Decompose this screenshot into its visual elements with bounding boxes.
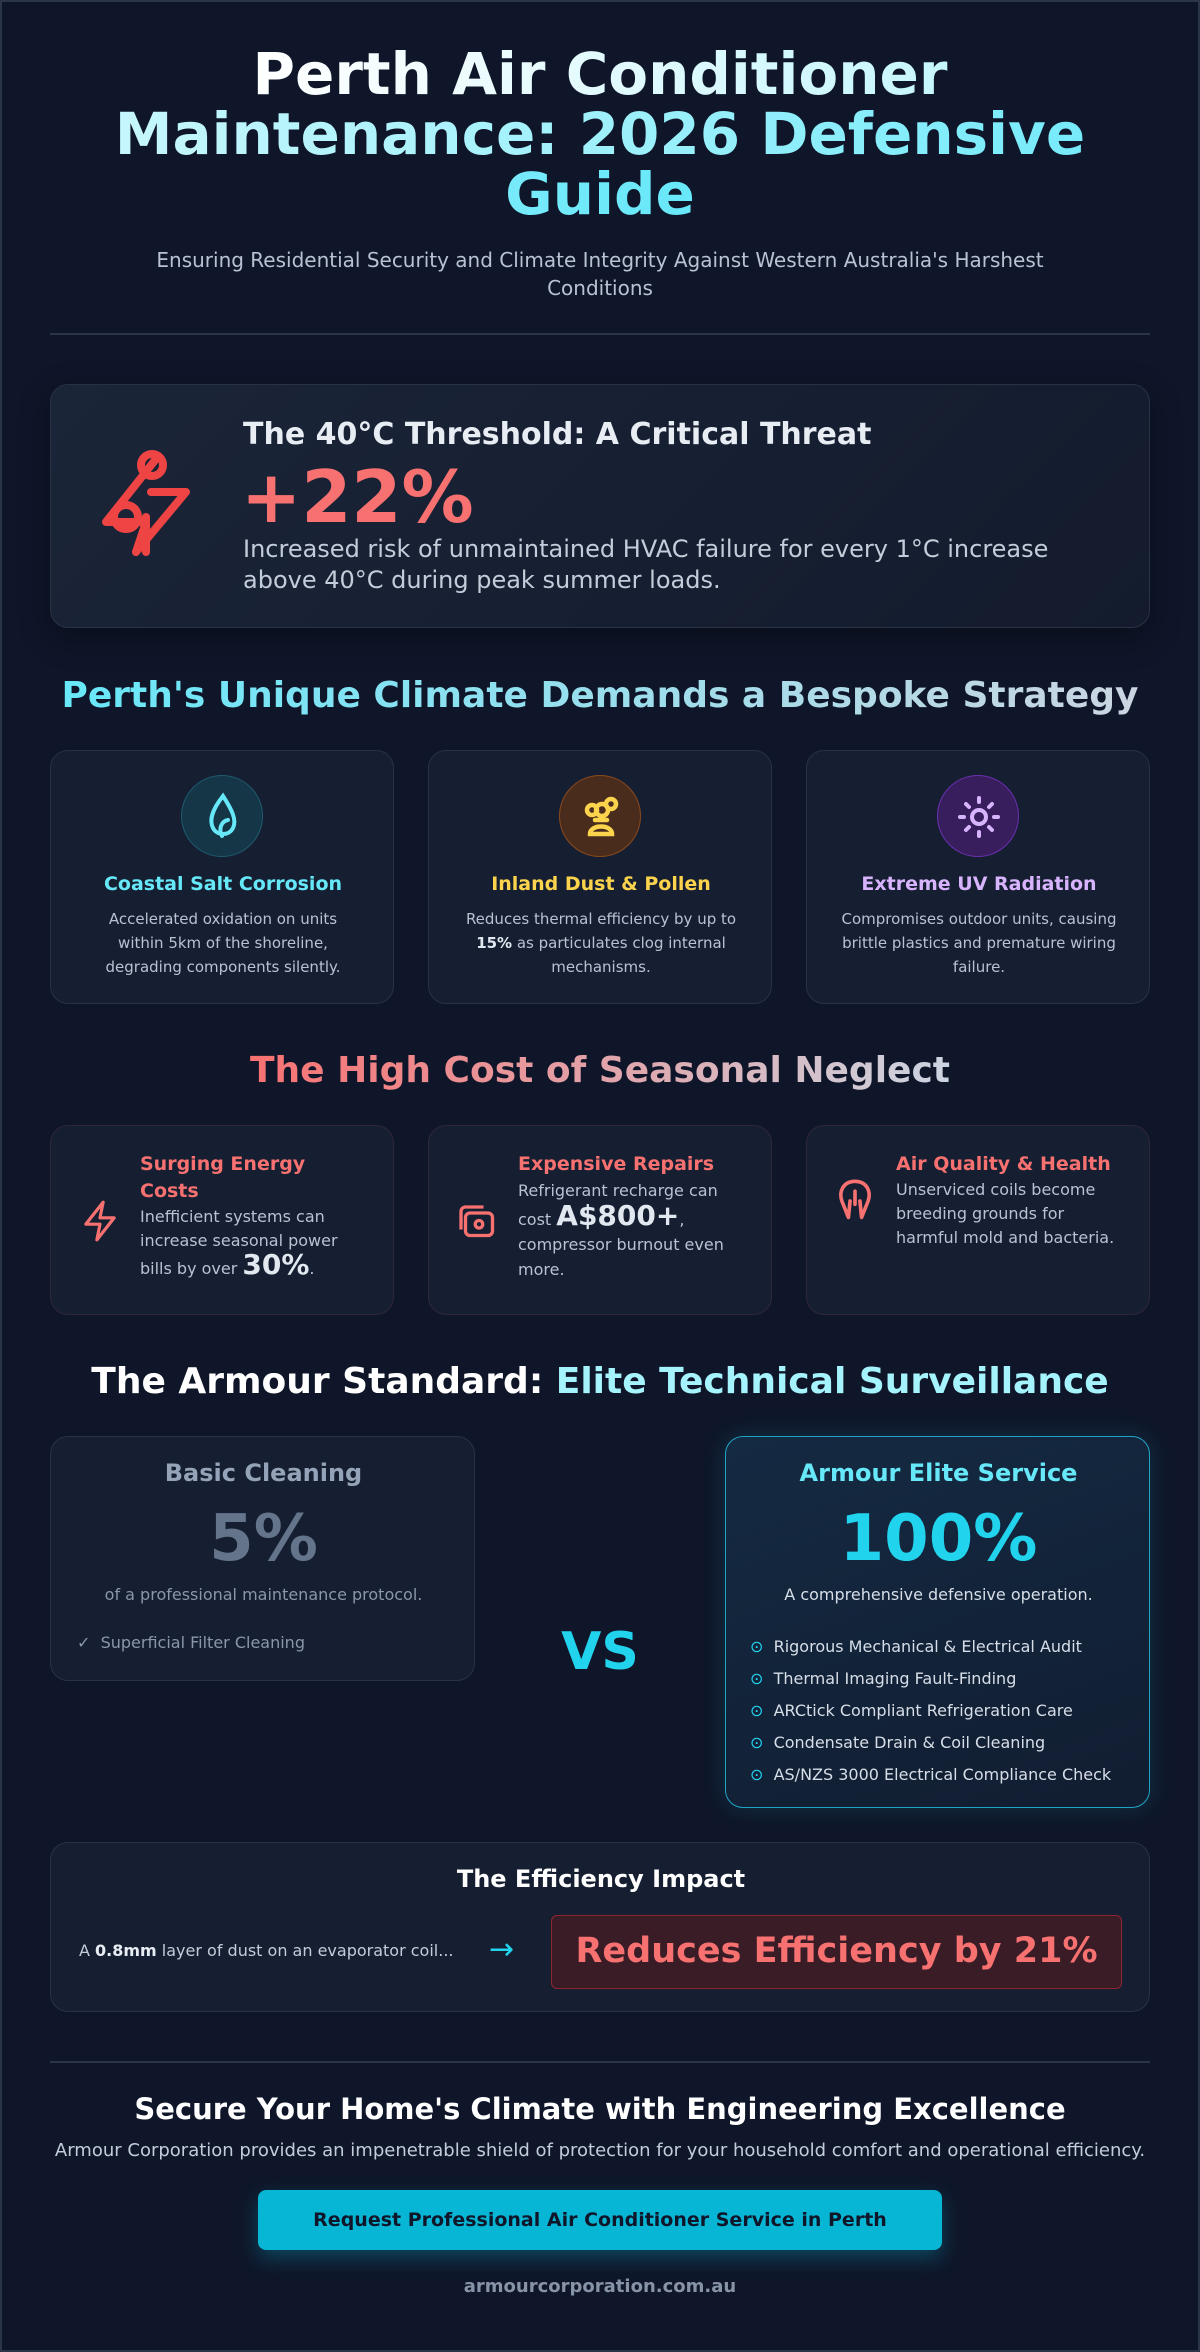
text: Accelerated oxidation on units within 5km of the shoreline, degrading components silently. (106, 910, 340, 976)
title: Basic Cleaning (165, 1459, 362, 1487)
footer: armourcorporation.com.au (464, 2276, 736, 2297)
stat: 100% (840, 1502, 1037, 1576)
title: Extreme UV Radiation (861, 873, 1097, 895)
icon: money (459, 1205, 494, 1238)
item: ✓ Superficial Filter Cleaning (77, 1633, 305, 1652)
title: The Efficiency Impact (457, 1865, 745, 1893)
panel: elite service (725, 1436, 1150, 1808)
left text: A 0.8mm layer of dust on an evaporator coil... (79, 1941, 453, 1960)
desc: A comprehensive defensive operation. (784, 1585, 1093, 1604)
icon: bolt (84, 1200, 116, 1242)
heading: armour standard: The Armour Standard: Elite Technical Surveillance (91, 1361, 1109, 1402)
arrow: → (489, 1932, 514, 1967)
text: Inefficient systems can increase seasonal power bills by over 30%. (140, 1207, 338, 1281)
checklist (750, 1637, 1111, 1784)
desc: of a professional maintenance protocol. (105, 1585, 422, 1604)
VS: VS (561, 1622, 639, 1682)
subtitle: Ensuring Residential Security and Climate Integrity Against Western Australia's Harshest Conditions (156, 248, 1044, 300)
button (258, 2190, 942, 2250)
text: Reduces thermal efficiency by up to 15% as particulates clog internal mechanisms. (466, 910, 736, 976)
panel: basic cleaning (50, 1436, 475, 1681)
panel: air quality (806, 1125, 1150, 1315)
callout: Reduces Efficiency by 21% (575, 1931, 1098, 1971)
icon: thermometer bolt (102, 450, 190, 556)
title: Coastal Salt Corrosion (104, 873, 342, 895)
icon: drop (181, 775, 263, 857)
checklist: ⊙ AS/NZS 3000 Electrical Compliance Check (750, 1765, 1111, 1784)
heading: The 40°C Threshold: A Critical Threat (243, 417, 872, 452)
stat: +22% (241, 455, 474, 539)
title: Armour Elite Service (800, 1459, 1077, 1487)
title: Inland Dust & Pollen (491, 873, 711, 895)
heading: cost: The High Cost of Seasonal Neglect (250, 1050, 950, 1091)
checklist: ⊙ ARCtick Compliant Refrigeration Care (750, 1701, 1073, 1720)
panel: repairs (428, 1125, 772, 1315)
title: Perth Air Conditioner Maintenance: 2026 Defensive Guide (115, 40, 1085, 228)
CTA heading: Secure Your Home's Climate with Engineering Excellence (134, 2092, 1066, 2126)
panel: dust (428, 750, 772, 1004)
panel: salt (50, 750, 394, 1004)
button: Request Professional Air Conditioner Service in Perth (313, 2209, 887, 2231)
heading: climate: Perth's Unique Climate Demands a Bespoke Strategy (61, 675, 1139, 716)
icon: sun (937, 775, 1019, 857)
text: Refrigerant recharge can cost A$800+, compressor burnout even more. (518, 1181, 724, 1279)
panel: energy (50, 1125, 394, 1315)
text: Unserviced coils become breeding grounds for harmful mold and bacteria. (896, 1180, 1114, 1247)
text (140, 1153, 338, 1281)
stat: 5% (209, 1502, 318, 1576)
icon: lungs (839, 1180, 871, 1220)
icon: pollen (559, 775, 641, 857)
checklist: ⊙ Rigorous Mechanical & Electrical Audit (750, 1637, 1082, 1656)
panel: efficiency impact (50, 1842, 1150, 2012)
checklist: ⊙ Thermal Imaging Fault-Finding (750, 1669, 1016, 1688)
panel: UV (806, 750, 1150, 1004)
text: Compromises outdoor units, causing brittle plastics and premature wiring failure. (842, 910, 1116, 976)
checklist: ⊙ Condensate Drain & Coil Cleaning (750, 1733, 1045, 1752)
callout (551, 1915, 1122, 1989)
text: Costs (140, 1180, 199, 1202)
text: Air Quality & Health (896, 1153, 1111, 1175)
CTA text: Armour Corporation provides an impenetrable shield of protection for your household comfort and operational efficiency. (55, 2140, 1145, 2161)
description: Increased risk of unmaintained HVAC failure for every 1°C increase above 40°C during peak summer loads. (243, 535, 1048, 594)
text: Surging Energy (140, 1153, 305, 1175)
panel: 40C threshold (50, 384, 1150, 628)
text: Expensive Repairs (518, 1153, 714, 1175)
